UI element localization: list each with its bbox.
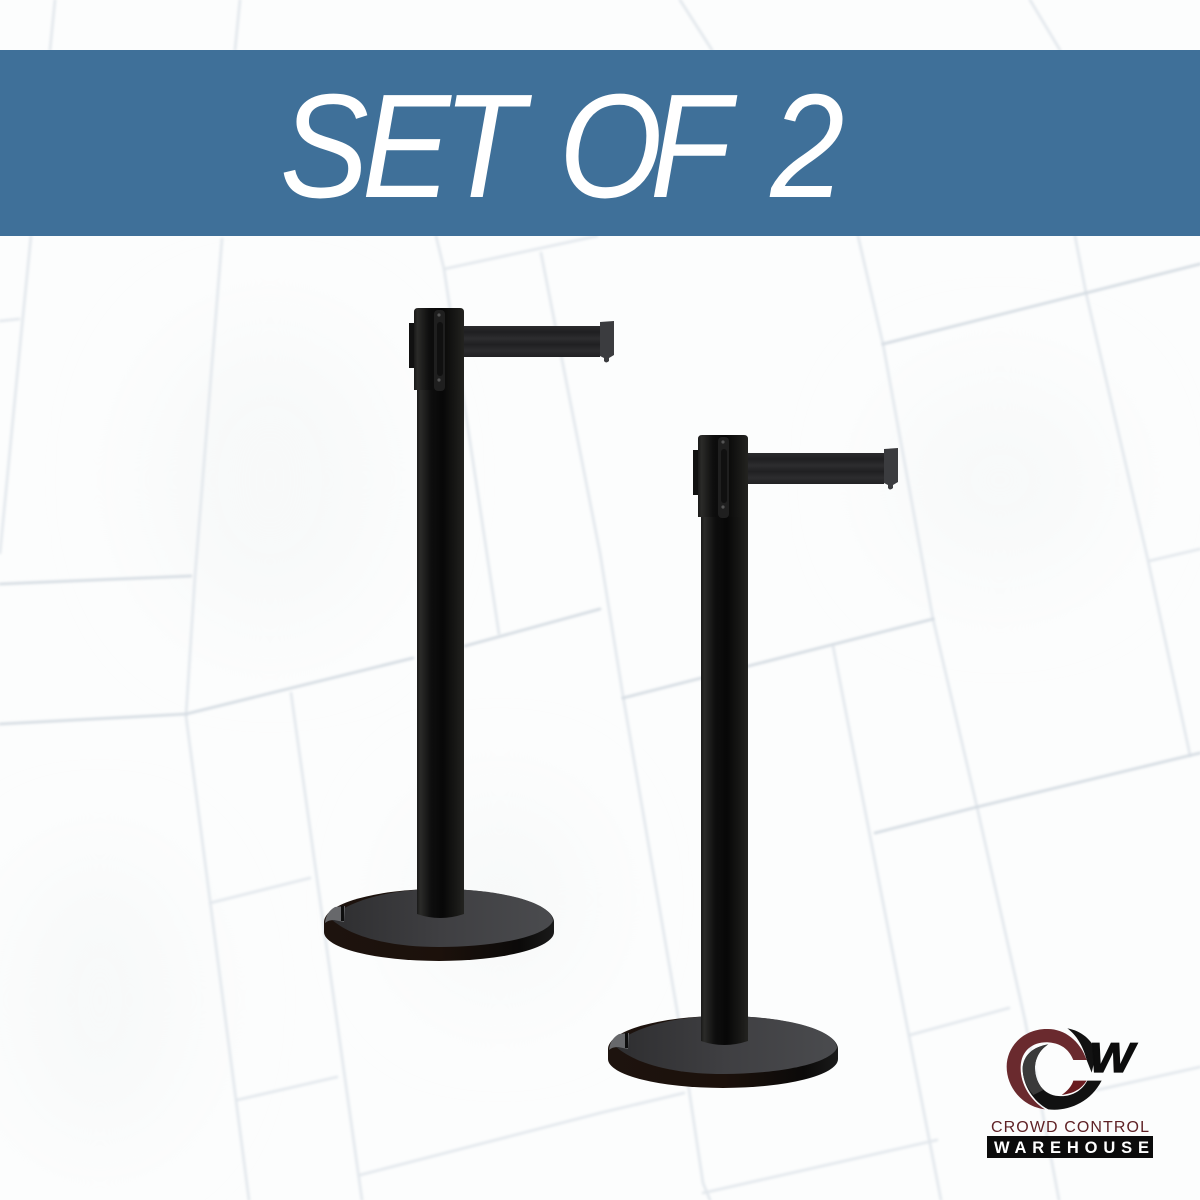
pole [417, 380, 464, 918]
belt [748, 453, 884, 484]
logo letter W: W [1089, 1034, 1138, 1081]
logo bar: Warehouse: WAREHOUSE [994, 1139, 1149, 1157]
cassette head [698, 435, 748, 517]
belt [464, 326, 600, 357]
stanchion: left post [324, 308, 614, 961]
cassette head [414, 308, 464, 390]
banner [0, 50, 1200, 236]
logo text: Crowd Control: CROWD CONTROL [991, 1119, 1149, 1136]
logo mark [1007, 1028, 1102, 1110]
belt end clip [600, 321, 614, 362]
base [608, 1016, 838, 1088]
base [324, 889, 554, 961]
logo: Crowd Control Warehouse [987, 1028, 1153, 1158]
title: SET OF 2: SET OF 2 [280, 64, 844, 229]
belt end clip [884, 448, 898, 490]
pole [701, 507, 748, 1045]
stanchion: right post [608, 435, 898, 1088]
